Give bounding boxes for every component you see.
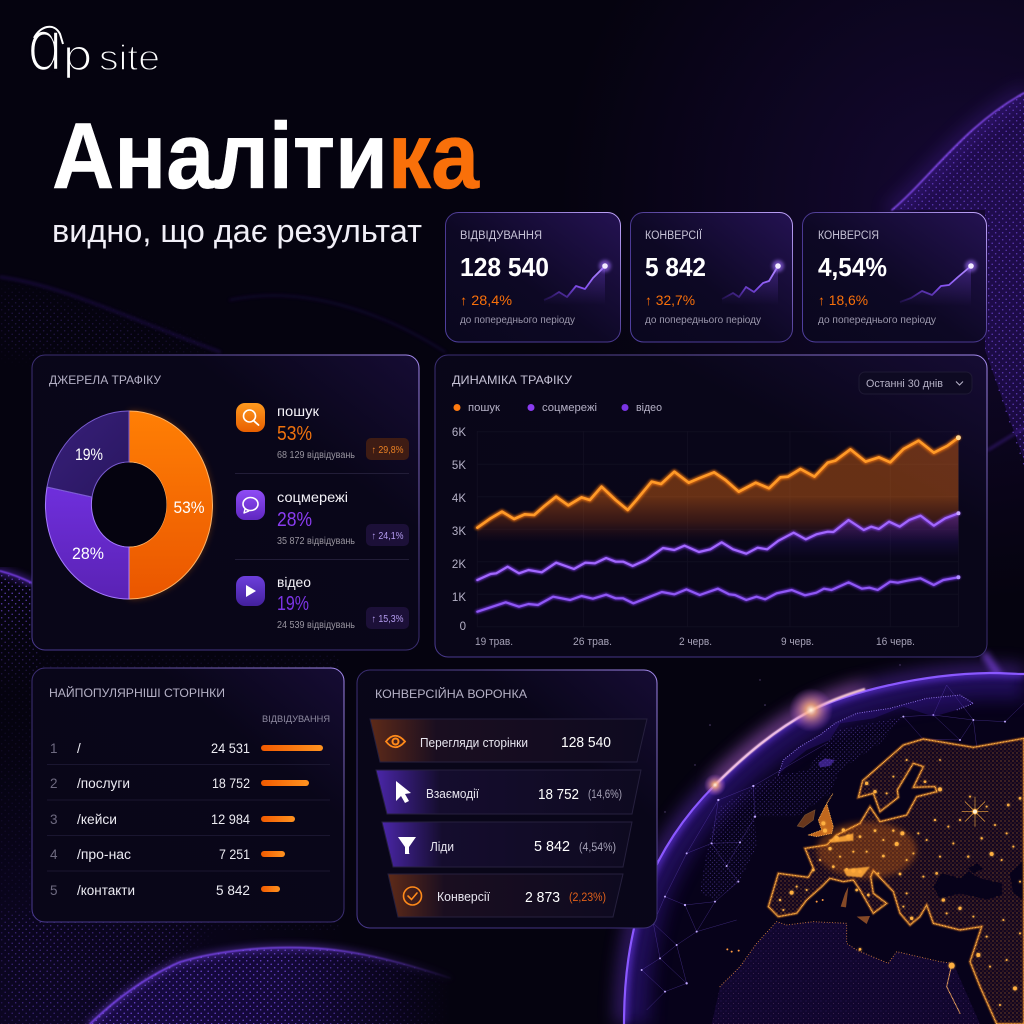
funnel step: leads: (4,54%) (579, 842, 616, 854)
cities (779, 759, 1021, 1006)
row 4 (50, 847, 285, 862)
funnel step: page views: Перегляди сторінки (420, 736, 528, 750)
sparkline (722, 260, 784, 305)
line chart: 3K (452, 526, 466, 538)
donut chart: 19% (75, 445, 103, 464)
donut chart: 28% (72, 544, 104, 563)
city glow (779, 759, 1021, 1006)
icon: search (236, 403, 265, 432)
row 4: 7 251 (219, 847, 250, 862)
logo: p (62, 31, 93, 80)
subtitle: видно, що дає результат (52, 213, 422, 249)
funnel step: conversions: (2,23%) (569, 892, 606, 904)
logo (27, 7, 160, 87)
area fills (477, 438, 958, 627)
panel: conversion funnel (357, 670, 657, 928)
line chart: 6K (452, 427, 466, 439)
donut chart: 53% (174, 498, 204, 517)
inner rim haze (624, 673, 1024, 1024)
funnel step: leads: 5 842 (534, 838, 570, 855)
row 3: /кейси (77, 812, 117, 827)
sparkline (900, 260, 977, 306)
series: social (477, 511, 960, 580)
kpi card: visits: ВІДВІДУВАННЯ (460, 230, 542, 242)
series: video (477, 575, 960, 612)
series: search (477, 435, 961, 528)
sicily sardinia corsica (841, 887, 870, 924)
funnel step: page views: 128 540 (561, 734, 611, 751)
funnel step: page views (370, 719, 647, 762)
row 1: / (77, 741, 81, 756)
kpi card: conversion rate (802, 212, 986, 342)
icon: eye (386, 736, 405, 747)
donut chart (45, 411, 212, 599)
row 5: /контакти (77, 883, 135, 898)
period dropdown: Останні 30 днів (866, 378, 943, 390)
globe (624, 664, 1024, 1024)
globe body (624, 673, 1024, 1024)
kpi card: visits (446, 212, 620, 342)
row 5: 5 (50, 883, 58, 898)
title: Аналітика (52, 103, 480, 208)
western europe glow (817, 822, 917, 878)
row 2: 18 752 (212, 776, 250, 791)
row 1: 24 531 (211, 741, 250, 756)
line chart: 5K (452, 460, 466, 472)
row 1 (50, 741, 323, 756)
kpi card: conversions (630, 212, 792, 342)
heading: НАЙПОПУЛЯРНІШІ СТОРІНКИ (49, 685, 225, 700)
panel: traffic dynamics (435, 355, 987, 657)
kpi card: conversions: ↑ 32,7% (645, 293, 695, 308)
funnel step: conversions: 2 873 (525, 889, 560, 906)
heading: КОНВЕРСІЙНА ВОРОНКА (375, 686, 527, 701)
row 2: 2 (50, 776, 58, 791)
kpi card: conversions: 5 842 (645, 252, 706, 282)
network lines (642, 685, 1024, 1010)
source: search: 53% (277, 423, 312, 445)
row 2: /послуги (77, 776, 130, 791)
source: video: 19% (277, 593, 309, 615)
panel: traffic sources (32, 355, 419, 650)
row 1: 1 (50, 741, 58, 756)
source: social: 28% (277, 509, 312, 531)
row 5 (50, 883, 280, 898)
line chart: 16 черв. (876, 636, 915, 648)
star burst (962, 797, 988, 827)
badge (366, 607, 409, 629)
row 3: 3 (50, 812, 58, 827)
funnel step: leads (382, 822, 632, 867)
funnel step: conversions (388, 874, 623, 917)
badge: ↑ 15,3% (372, 614, 404, 625)
sparkline (544, 260, 611, 305)
source: social: соцмережі (277, 489, 348, 505)
icon: check circle (404, 887, 422, 905)
badge: ↑ 29,8% (372, 445, 404, 456)
kpi card: conversions: до попереднього періоду (645, 314, 762, 326)
line chart: 2K (452, 559, 466, 571)
globe rim (624, 673, 1024, 1024)
stars (664, 664, 901, 813)
heading: ДЖЕРЕЛА ТРАФІКУ (49, 373, 161, 387)
black sea and caspian (933, 872, 1002, 899)
kpi card: visits: ↑ 28,4% (460, 293, 512, 308)
kpi card: visits: до попереднього періоду (460, 314, 576, 326)
line chart (452, 427, 961, 648)
legend: пошук (468, 402, 500, 414)
kpi card: conversion rate: до попереднього періоду (818, 314, 937, 326)
legend (454, 402, 662, 414)
icon: cursor (396, 781, 411, 803)
benelux and north italy highlights (828, 833, 870, 877)
column label: ВІДВІДУВАННЯ (262, 714, 330, 725)
funnel step: conversions: Конверсії (437, 890, 491, 904)
globe map (624, 673, 1024, 1024)
funnel step: interactions (376, 770, 641, 814)
funnel step: leads: Ліди (430, 840, 454, 854)
icon: play (236, 576, 265, 606)
line chart: 1K (452, 592, 466, 604)
badge (366, 438, 409, 460)
icon: funnel (398, 837, 416, 854)
line chart: 2 черв. (679, 636, 712, 648)
source: social: 35 872 відвідувань (277, 536, 355, 547)
source: search: 68 129 відвідувань (277, 450, 355, 461)
source: search: пошук (277, 403, 320, 419)
legend: соцмережі (542, 402, 597, 414)
row 2 (50, 776, 309, 791)
logo: ɑ (27, 7, 63, 87)
source: social (236, 489, 409, 547)
period dropdown (859, 372, 972, 394)
badge (366, 524, 409, 546)
heading: ДИНАМІКА ТРАФІКУ (452, 373, 572, 387)
row 3: 12 984 (211, 812, 250, 827)
line chart: 4K (452, 493, 466, 505)
row 4: /про-нас (77, 847, 131, 862)
badge: ↑ 24,1% (372, 531, 404, 542)
kpi card: visits: 128 540 (460, 252, 549, 282)
source: video: відео (277, 574, 311, 590)
source: search (236, 403, 409, 461)
panel: top pages (32, 668, 344, 922)
row 3 (50, 812, 295, 827)
british isles (797, 794, 833, 837)
kpi card: conversion rate: КОНВЕРСІЯ (818, 230, 879, 242)
logo: site (99, 37, 160, 78)
kpi card: conversion rate: 4,54% (818, 252, 887, 282)
line chart: 9 черв. (781, 636, 814, 648)
line chart: 0 (460, 621, 466, 633)
row 5: 5 842 (216, 883, 250, 898)
funnel step: interactions: (14,6%) (588, 789, 622, 801)
funnel step: interactions: 18 752 (538, 786, 579, 803)
source: video: 24 539 відвідувань (277, 620, 355, 631)
kpi card: conversion rate: ↑ 18,6% (818, 293, 868, 308)
kpi card: conversions: КОНВЕРСІЇ (645, 230, 703, 242)
globe outer glow (624, 673, 1024, 1024)
africa (707, 899, 983, 1024)
line chart: 26 трав. (573, 636, 612, 648)
line chart: 19 трав. (475, 636, 513, 648)
legend: відео (636, 402, 662, 414)
greenland (778, 695, 973, 775)
funnel step: interactions: Взаємодії (426, 787, 479, 801)
icon: chat (236, 490, 265, 520)
europe land (767, 737, 1024, 1024)
row 4: 4 (50, 847, 58, 862)
network nodes (641, 714, 1006, 993)
atlantic dot field (700, 717, 903, 900)
source: video (236, 574, 409, 631)
